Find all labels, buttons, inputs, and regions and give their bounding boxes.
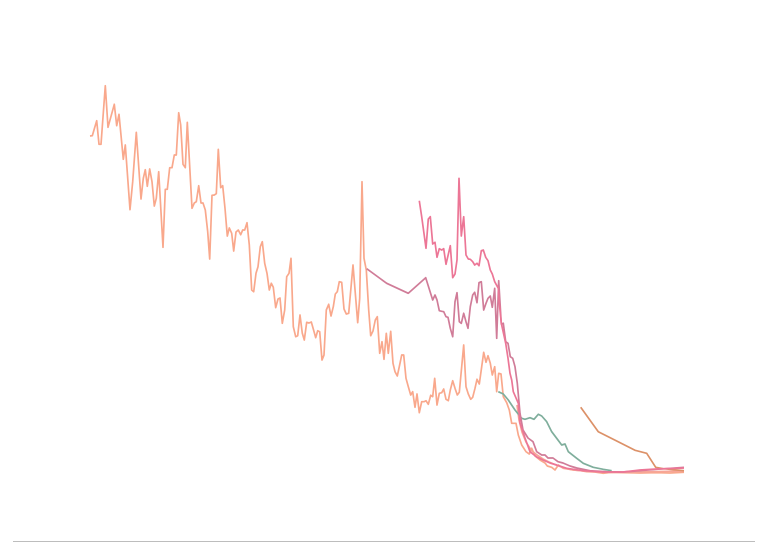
- line: mauve series: [367, 269, 684, 472]
- line: long orange series: [90, 86, 684, 473]
- baseline rule: [13, 541, 755, 542]
- line: brown series: [581, 407, 684, 471]
- line: pink series: [419, 178, 684, 472]
- line: second salmon series: [517, 405, 684, 472]
- line: green series: [498, 392, 612, 471]
